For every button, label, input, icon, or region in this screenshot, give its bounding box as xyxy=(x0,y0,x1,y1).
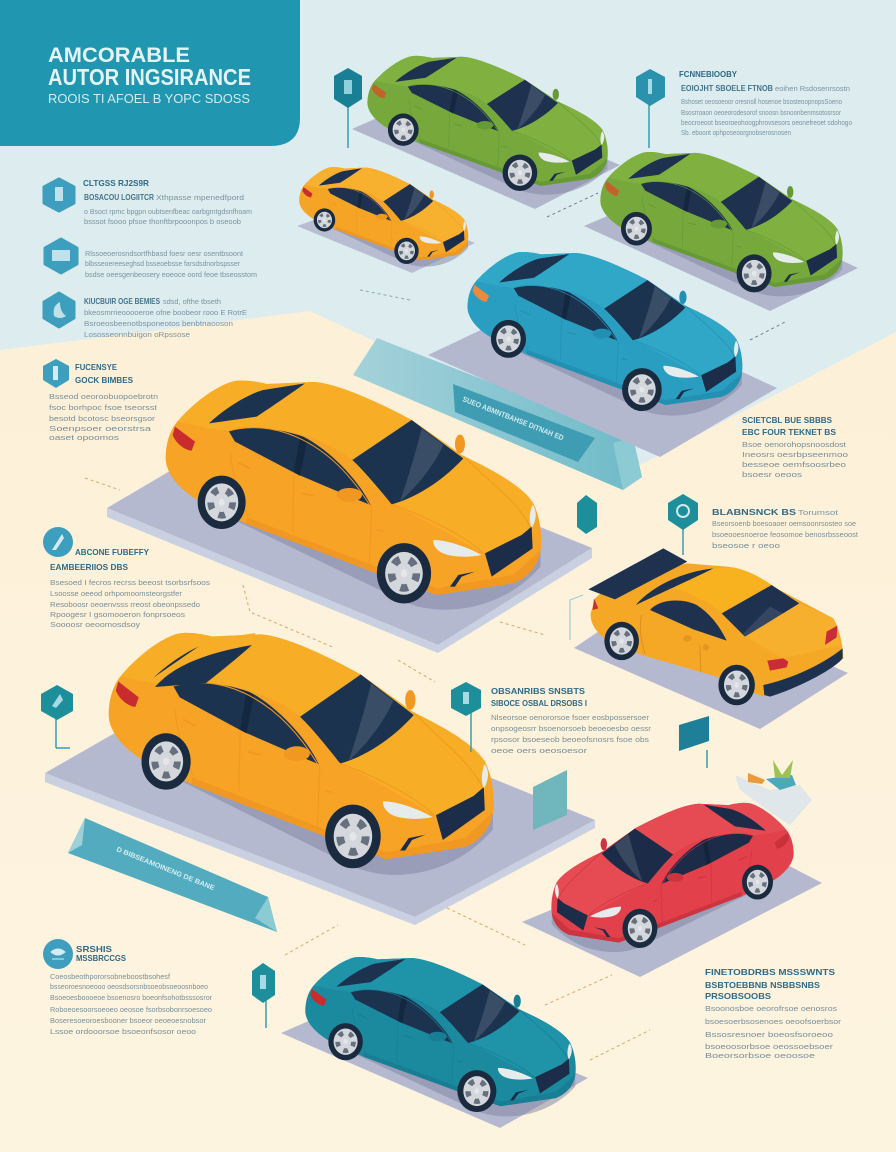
rear window xyxy=(155,645,252,687)
text block G: EBC FOUR TEKNET BS xyxy=(742,427,836,437)
text block D: FUCENSYE xyxy=(75,362,117,372)
text block D xyxy=(49,362,158,442)
text block I xyxy=(491,686,652,755)
text block F: EOIOJHT SBOELE FTNOB xyxy=(681,84,773,93)
car 4: blue xyxy=(428,252,777,457)
text block D: Soenpsoer oeorstrsa xyxy=(49,424,151,433)
text block D: oaset opoomos xyxy=(49,433,120,442)
text block C: KIUCBUIR OGE BEMIES xyxy=(84,297,161,306)
text block E: Bsesoed I fecros recrss beeost tsorbsrfsoos xyxy=(50,578,210,587)
text block G: Ineosrs oesrbpseenmoo xyxy=(742,450,848,459)
text block K: FINETOBDRBS MSSSWNTS xyxy=(705,967,835,977)
text block B: Rlssoeoerosndsortfhbasd foesr oesr osentbsoont xyxy=(85,249,243,258)
text block G: besseoe oemfsoosrbeo xyxy=(742,460,846,469)
dish illustration xyxy=(735,760,812,825)
text block K: Bsoonosboe oeorofrsoe oenosros xyxy=(705,1004,837,1013)
text block A: Xthpasse mpenedfpord xyxy=(156,193,244,202)
text block C: Bsroeosbeenotbsponeotos benbtnaooson xyxy=(84,319,233,328)
glass panel xyxy=(533,770,567,830)
icon: hexagon C xyxy=(44,293,74,327)
text block G: bsoesr oeoos xyxy=(742,470,803,479)
text block K: Bssosresnoer boeosfsoroeoo xyxy=(705,1030,833,1039)
text block A: CLTGSS RJ2S9R xyxy=(83,178,149,188)
text block G xyxy=(742,415,848,479)
car 8: red xyxy=(522,803,822,977)
text block F xyxy=(679,69,852,137)
door lines xyxy=(640,615,701,672)
text block D: besotd bcotosc bseorsgsor xyxy=(49,414,156,423)
spoiler xyxy=(588,548,687,599)
title xyxy=(48,44,251,106)
text block B: blbsseoereeseghsd bsseoebsse farsdsdnorbspsser xyxy=(85,259,241,268)
text block F: Bshoset oeosoeoor oresnoll hosenoe bsosteoopnopsSoeno xyxy=(681,97,842,106)
icon: hexagon D xyxy=(43,359,69,388)
text block E xyxy=(50,547,210,629)
text block E: ABCONE FUBEFFY xyxy=(75,547,149,557)
header panel xyxy=(0,0,300,146)
text block C: sdsd, ofthe tbseth xyxy=(163,297,221,306)
car 2: green right xyxy=(584,152,858,311)
text block A: BOSACOU LOGIITCR xyxy=(84,193,154,202)
tail lights xyxy=(593,598,837,671)
text block C: bkeosmrrieooooeroe ofne boobeor rooo E RotrE xyxy=(84,308,247,317)
banner: lower ribbon xyxy=(68,818,277,932)
trunk repaint xyxy=(150,633,256,680)
text block G: Bsoe oenorohopsnoosdost xyxy=(742,440,846,449)
pin marker 1 xyxy=(334,68,362,148)
text block H: Torumsot xyxy=(798,508,838,517)
text block B xyxy=(85,249,257,279)
text block K: Boeorsorbsoe oeoosoe xyxy=(705,1051,815,1060)
text block F: Sb. eboont ophposeoorgnobserosnosen xyxy=(681,128,791,137)
text block K: BSBTOEBBNB NSBBSNBS xyxy=(705,980,820,990)
text block F: eoihen Rsdosenrsostn xyxy=(775,84,850,93)
icon: hexagon J xyxy=(43,939,73,969)
text block J: Coeosbeothpororsobneboostbsohesf xyxy=(50,972,170,981)
pin marker 6 xyxy=(41,685,73,748)
text block E: Rpoogesr I gsomooeron fonprsoeos xyxy=(50,610,185,619)
text block E: Soooosr oeoomosdsoy xyxy=(50,620,140,629)
flag sign xyxy=(679,716,709,768)
text block E: Lsoosse oeeod orhpomoomsteorgstfer xyxy=(50,589,183,598)
text block C: Lososseonnbuigon oRpssose xyxy=(84,330,190,339)
banner: lower ribbon: D BIBSEAMOINENG DE BANE xyxy=(115,846,216,892)
text block B: bsdse oeesgenbeosery eoeoce oord feoe tbseosstom xyxy=(85,270,257,279)
pin marker 2 xyxy=(636,69,665,148)
text block H: BLABNSNCK BS xyxy=(712,507,796,517)
text block D: fsoc borhpoc fsoe tseorsst xyxy=(49,403,157,412)
text block A xyxy=(83,178,252,226)
title: AUTOR INGSIRANCE xyxy=(48,64,251,90)
bracket xyxy=(570,595,583,640)
pin marker 3 xyxy=(577,495,597,534)
car 1: green top xyxy=(352,56,620,209)
text block I: Nlseorsoe oenororsoe fsoer eosbpossersoer xyxy=(491,713,650,722)
text block E: EAMBEERIIOS DBS xyxy=(50,562,128,572)
banner: upper ribbon xyxy=(353,338,642,490)
title: ROOIS TI AFOEL B YOPC SDOSS xyxy=(48,92,250,106)
rear window strip xyxy=(636,568,713,605)
text block J: Boseresoeoroesbooner bsoeor oeoeoesnobsor xyxy=(50,1016,207,1025)
side window xyxy=(650,600,727,641)
text block J: bsseoroesnoeooo oeosdsorsnbsoeobsoeoosnboeo xyxy=(50,982,208,991)
back window xyxy=(722,585,799,637)
text block J: Roboeoesoorsoeoeo oeosoe fsorbsobonrsoesoeo xyxy=(50,1005,212,1014)
text block K: bsoeoosorbsoe oeossoebsoer xyxy=(705,1042,834,1051)
text block H xyxy=(712,507,858,550)
text block F: Bsosrroaon oeoeorodesorof snoosn bsnoonbenmsotosrsor xyxy=(681,108,842,117)
text block J: Bsoeoesboooeoe bsoenosro boeonfsohotbsssosror xyxy=(50,993,213,1002)
text block K: PRSOBSOOBS xyxy=(705,991,771,1001)
text block E: Resoboosr oeoenvsss rreost obeonpssedo xyxy=(50,600,200,609)
text block J xyxy=(50,944,213,1036)
text block J: SRSHIS xyxy=(76,944,112,954)
car 9: teal xyxy=(281,957,588,1128)
text block K: bsoesoerbsosenoes oeoofsoerbsor xyxy=(705,1017,842,1026)
pin marker 4 xyxy=(668,494,698,555)
text block D: Bsseod oeoroobuopoebrotn xyxy=(49,392,158,401)
text block A: bsssot fsooo pfsoe thonftbrpooonpos b oseoob xyxy=(84,217,241,226)
icon: hexagon B xyxy=(45,239,77,273)
text block I: OBSANRIBS SNSBTS xyxy=(491,686,585,696)
title: AMCORABLE xyxy=(48,44,190,67)
dashed connector lines xyxy=(85,193,785,1060)
pin marker 7 xyxy=(252,963,275,1028)
text block F: beocroeoot bseoroeohoogphrovsesors oeonefreoet sdohogo xyxy=(681,118,852,127)
text block H: bseosoe r oeoo xyxy=(712,541,780,550)
text block D: GOCK BIMBES xyxy=(75,375,133,385)
car 3: small orange xyxy=(297,167,475,273)
car 5: large orange xyxy=(107,381,592,653)
text block I: oeoe oers oeosoesor xyxy=(491,746,588,755)
text block K xyxy=(705,967,842,1060)
pin marker 5 xyxy=(451,682,481,752)
text block I: SIBOCE OSBAL DRSOBS I xyxy=(491,698,587,708)
text block I: rpsosor bsoeseob beoeofsnosrs fsoe obs xyxy=(491,735,649,744)
banner: upper ribbon: SUEO ABMNTBAHSE DITNAH ED xyxy=(461,394,566,443)
text block G: SCIETCBL BUE SBBBS xyxy=(742,415,832,425)
bumper xyxy=(763,648,843,697)
text block H: Bseorsoenb boesoaoer oemsoonrsosteo soe xyxy=(712,519,856,528)
text block F: FCNNEBIOOBY xyxy=(679,69,737,79)
car 6: yellow rear view xyxy=(574,548,848,729)
text block J: MSSBRCCGS xyxy=(76,953,126,963)
text block A: o Bsoct rpmc bpgpn oubtsenfbeac oarbgmtgdsnfhoam xyxy=(84,207,252,216)
icon: hexagon A xyxy=(44,179,74,211)
text block C xyxy=(84,297,247,339)
car 7: large orange lower xyxy=(45,633,595,925)
text block J: Lssoe ordooorsoe bsoeonfsosor oeoo xyxy=(50,1027,196,1036)
text block I: onpsogeosrr bsoenorsoeb beoeoesbo oessr xyxy=(491,724,652,733)
text block H: bsoeooesnoeroe feosomoe benosrbsseoost xyxy=(712,530,858,539)
icon: round E xyxy=(43,527,73,557)
